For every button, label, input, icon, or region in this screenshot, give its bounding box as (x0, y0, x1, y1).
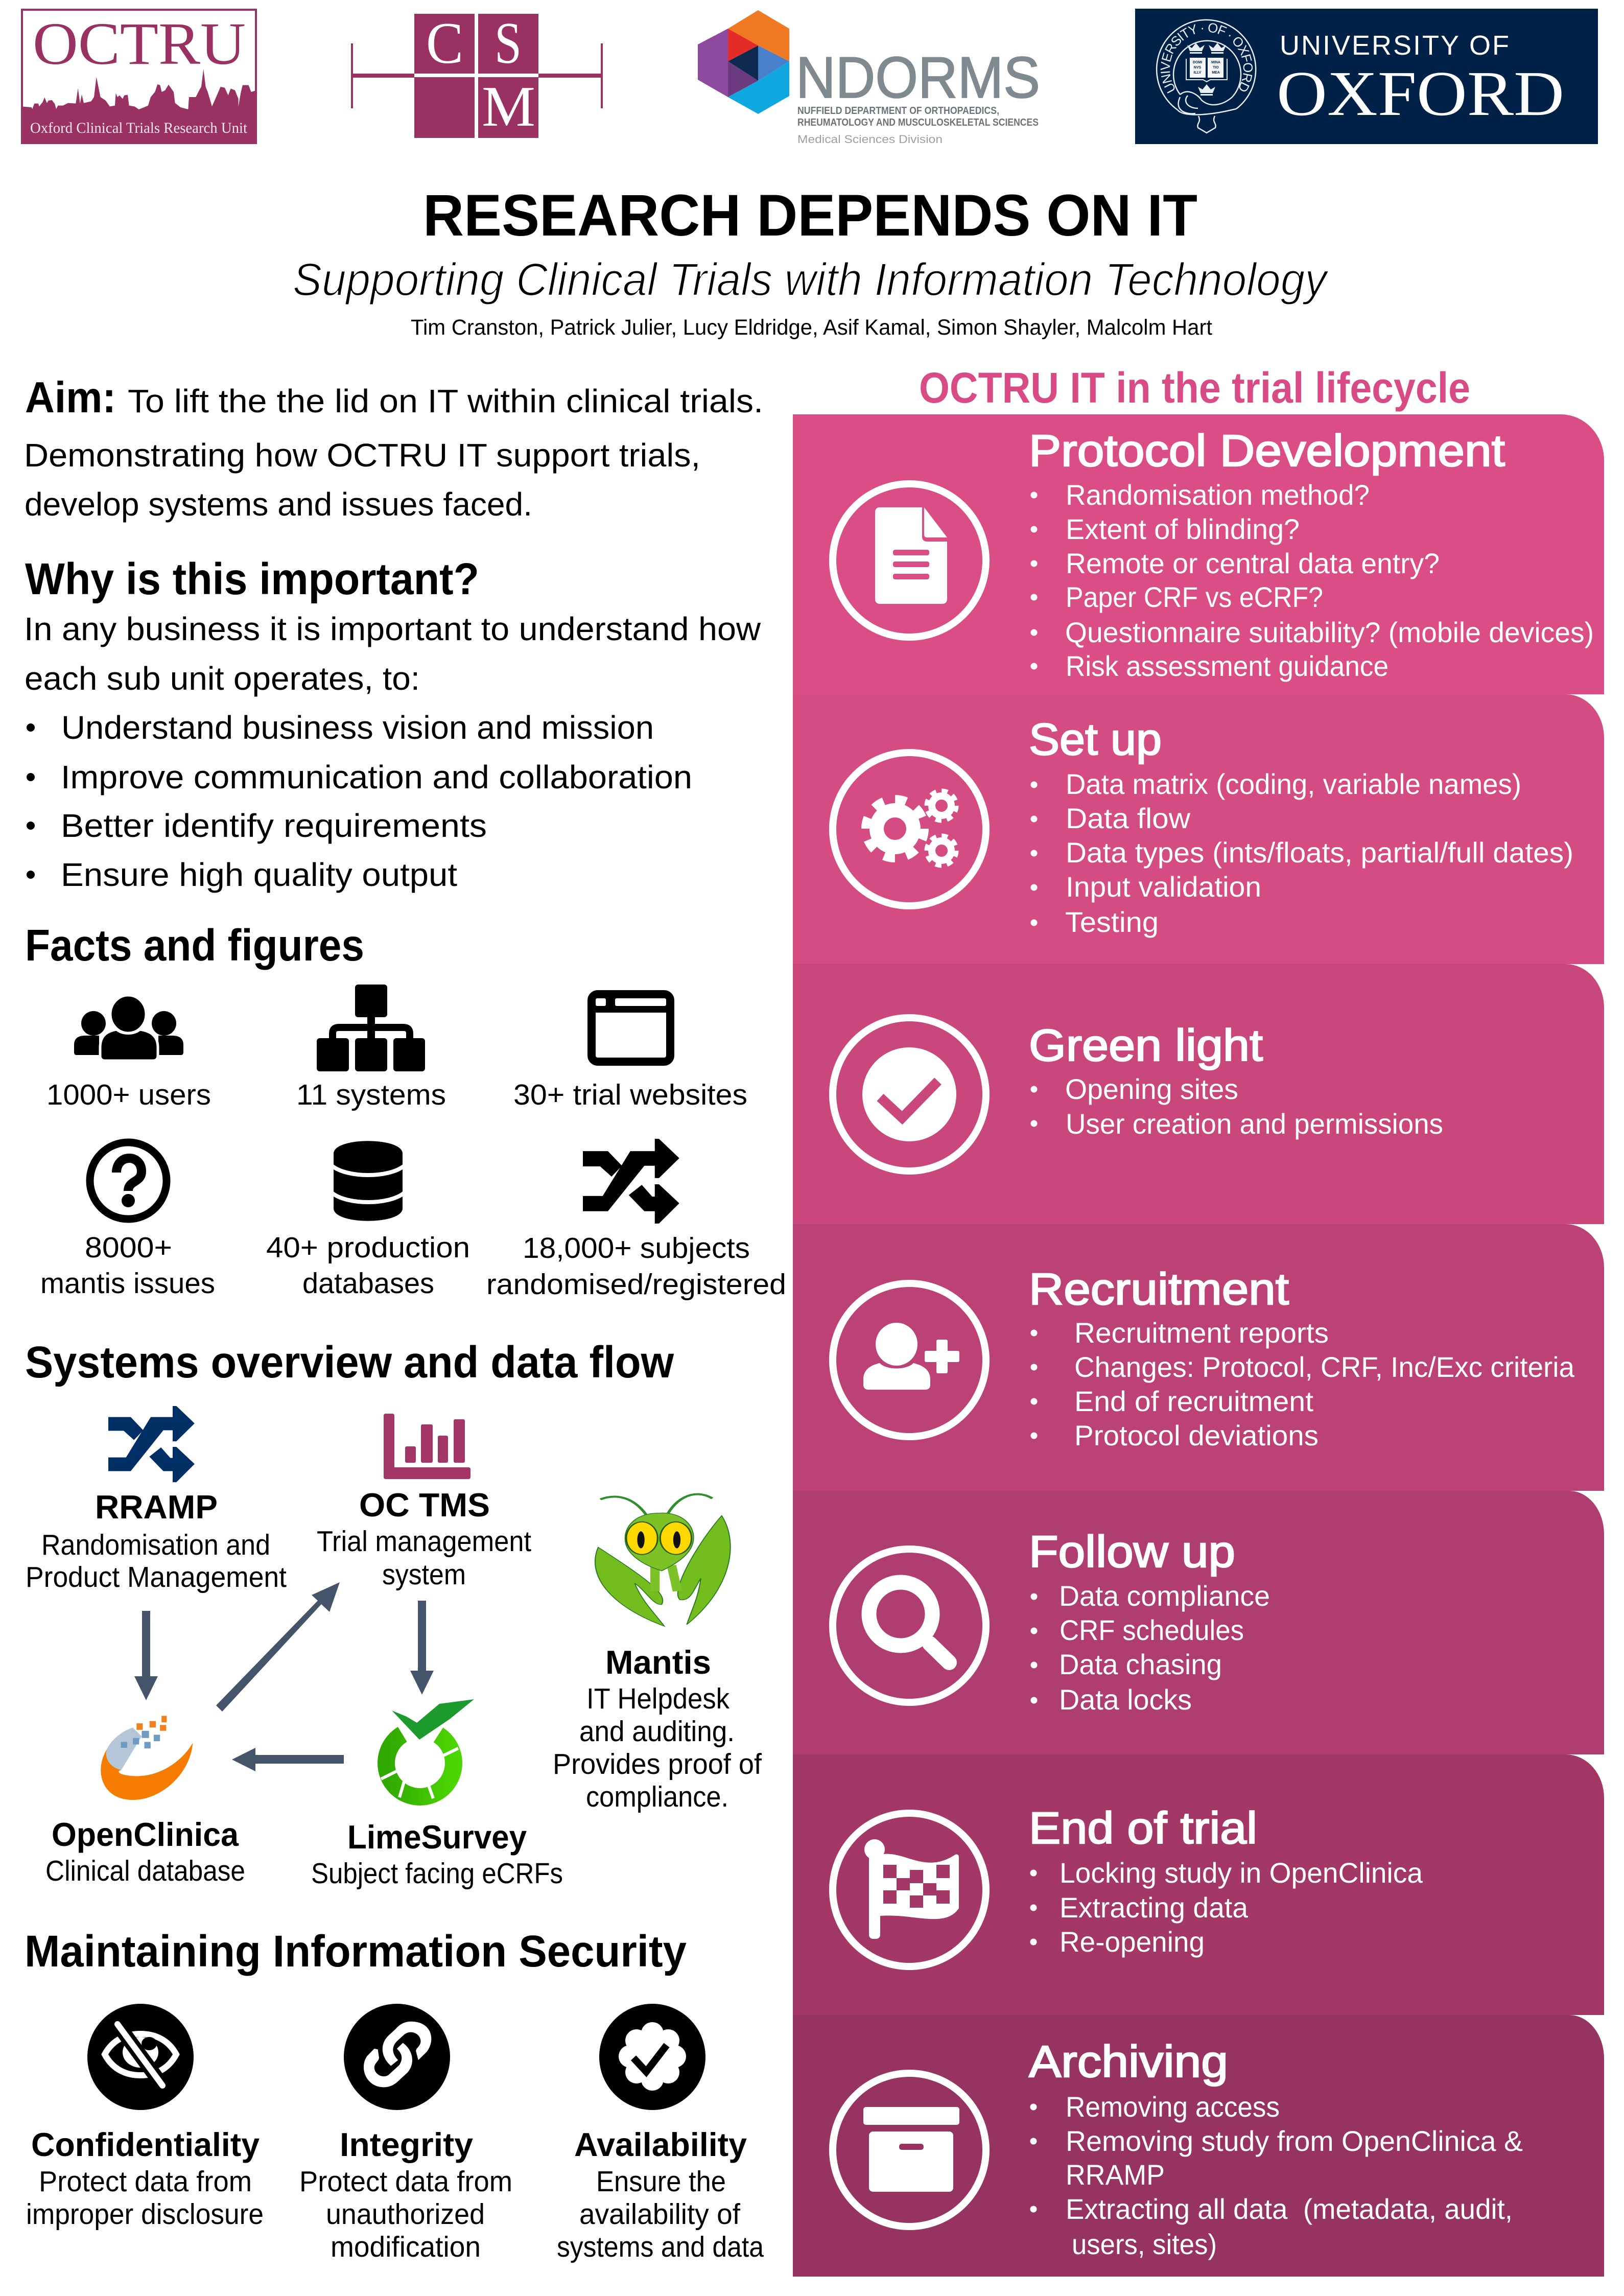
text block: aim: develop systems and issues faced. (25, 486, 532, 523)
label: Mantis: Provides proof of (553, 1748, 762, 1780)
panel: green light (793, 964, 1604, 1224)
label: OpenClinica (45, 1816, 245, 1887)
text: archiving (1029, 2037, 1523, 2260)
text: availability: Ensure the (596, 2165, 726, 2198)
text: archiving: Extracting all data (metadata, audit, (1066, 2193, 1513, 2225)
logo: University of Oxford: UNIVERSITY · OF · OXFORD (1161, 24, 1253, 93)
text: protocol development: Randomisation method? (1066, 479, 1370, 511)
label: Mantis: and auditing. (579, 1715, 735, 1748)
text block: why important: Ensure high quality output (61, 856, 457, 893)
label: OC TMS: OC TMS (359, 1486, 490, 1524)
label: Mantis (553, 1644, 762, 1813)
text block: why important: Improve communication and collaboration (61, 759, 692, 795)
label: Mantis: Mantis (605, 1644, 711, 1681)
text: integrity: unauthorized (326, 2198, 485, 2231)
text: follow up (1029, 1527, 1270, 1716)
label: mantis issues (40, 1231, 215, 1300)
icon: document (833, 484, 986, 637)
label: RRAMP: RRAMP (95, 1488, 218, 1526)
label: users: 1000+ users (46, 1079, 211, 1111)
label: OpenClinica: OpenClinica (52, 1816, 239, 1853)
text: availability (557, 2126, 764, 2263)
text: integrity: Protect data from (299, 2165, 512, 2198)
label: subjects randomised: 18,000+ subjects (523, 1232, 750, 1264)
text: green light: Opening sites (1065, 1073, 1238, 1105)
text: end of trial (1029, 1803, 1423, 1958)
icon: chequered flag (833, 1813, 986, 1966)
label: OC TMS (317, 1486, 531, 1591)
heading: why is this important: Why is this important? (25, 554, 479, 604)
text: follow up: Data locks (1059, 1683, 1192, 1716)
label: RRAMP (26, 1488, 287, 1594)
panel: end of trial (793, 1754, 1604, 2015)
logo: OCTRU: OCTRU (33, 10, 246, 77)
icon: users (74, 995, 183, 1061)
text block: why important (24, 611, 761, 893)
logo: University of Oxford: TIO (1213, 66, 1219, 69)
label: Mantis: IT Helpdesk (586, 1682, 729, 1715)
text: end of trial: Re-opening (1060, 1926, 1205, 1958)
logo: University of Oxford (1135, 9, 1598, 144)
text: green light (1029, 1021, 1443, 1140)
text: set up: Data types (ints/floats, partial/full dates) (1066, 836, 1573, 869)
text: green light: User creation and permissions (1066, 1108, 1443, 1140)
text: archiving: users, sites) (1072, 2228, 1217, 2260)
text: availability: availability of (579, 2198, 740, 2231)
label: RRAMP: Randomisation and (41, 1529, 270, 1561)
label: mantis issues: 8000+ (85, 1231, 172, 1264)
text: follow up: CRF schedules (1060, 1614, 1244, 1646)
heading: lifecycle: OCTRU IT in the trial lifecycle (919, 364, 1470, 412)
text: recruitment (1029, 1264, 1575, 1451)
label: trial websites: 30+ trial websites (513, 1079, 747, 1111)
text: recruitment: Recruitment reports (1074, 1317, 1329, 1349)
text: archiving: RRAMP (1066, 2159, 1165, 2191)
text: recruitment: End of recruitment (1074, 1385, 1313, 1417)
label: RRAMP: Product Management (26, 1561, 287, 1594)
logo: CSM: S (495, 11, 522, 76)
text block: why important: Better identify requirements (61, 807, 487, 844)
label: production databases (266, 1231, 470, 1300)
panel: archiving (793, 2015, 1604, 2277)
logo: NDORMS (698, 10, 1040, 146)
text: end of trial: End of trial (1029, 1803, 1257, 1853)
logo: University of Oxford: MEA (1212, 71, 1220, 75)
arrow: RRAMP to OpenClinica (134, 1611, 158, 1700)
text block: aim: To lift the the lid on IT within clinical trials. (128, 383, 763, 419)
text: confidentiality: improper disclosure (26, 2198, 264, 2231)
logo: University of Oxford: NVS (1194, 66, 1202, 69)
text block: why important: Understand business vision and mission (61, 709, 654, 746)
heading: maintaining information security: Maintaining Information Security (25, 1927, 687, 1976)
text: protocol development: Paper CRF vs eCRF? (1066, 581, 1323, 613)
text: protocol development (1029, 426, 1594, 682)
icon: browser window (592, 994, 670, 1062)
text: protocol development: Remote or central data entry? (1066, 547, 1440, 579)
text: archiving: Removing study from OpenClinica & (1066, 2125, 1523, 2157)
text: confidentiality (26, 2126, 264, 2231)
text: set up: Input validation (1066, 871, 1261, 903)
icon: question mark (90, 1142, 167, 1219)
icon: OpenClinica (101, 1716, 193, 1800)
panel: recruitment (793, 1224, 1604, 1491)
text: protocol development: Extent of blinding? (1066, 513, 1300, 545)
text block: why important: In any business it is important to understand how (24, 611, 761, 647)
text: set up: Data flow (1066, 802, 1191, 834)
logo: CSM: M (482, 75, 535, 138)
text: archiving: Archiving (1029, 2037, 1228, 2087)
label: LimeSurvey (311, 1818, 563, 1890)
icon: check (833, 1018, 986, 1171)
label: LimeSurvey: Subject facing eCRFs (311, 1857, 563, 1890)
label: systems: 11 systems (296, 1079, 446, 1111)
text: recruitment: Changes: Protocol, CRF, Inc/Exc criteria (1074, 1351, 1575, 1383)
text: set up: Testing (1065, 906, 1159, 938)
logo: University of Oxford: MINA (1211, 61, 1220, 64)
subtitle: Supporting Clinical Trials with Information Technology (293, 254, 1329, 306)
authors: Tim Cranston, Patrick Julier, Lucy Eldridge, Asif Kamal, Simon Shayler, Malcolm Hart (411, 315, 1212, 340)
panel: protocol development (793, 414, 1604, 694)
icon: hierarchy (317, 985, 425, 1071)
heading: systems overview: Systems overview and data flow (25, 1338, 674, 1387)
text: set up: Set up (1029, 715, 1162, 764)
text: set up (1029, 715, 1573, 938)
text: integrity: Integrity (340, 2126, 473, 2163)
logo: University of Oxford: UNIVERSITY OF (1280, 30, 1509, 61)
text block: aim (24, 373, 763, 523)
text: follow up: Data compliance (1059, 1580, 1270, 1612)
text: recruitment: Protocol deviations (1074, 1419, 1319, 1451)
text: follow up: Follow up (1029, 1527, 1235, 1577)
text: follow up: Data chasing (1059, 1648, 1222, 1680)
heading: facts and figures: Facts and figures (25, 921, 364, 970)
logo: OCTRU: Oxford Clinical Trials Research Unit (30, 120, 248, 136)
title: RESEARCH DEPENDS ON IT (423, 183, 1197, 248)
logo: NDORMS: NDORMS (796, 45, 1040, 110)
logo: NDORMS: Medical Sciences Division (797, 133, 943, 146)
label: LimeSurvey: LimeSurvey (347, 1818, 527, 1856)
label: OpenClinica: Clinical database (45, 1855, 245, 1887)
label: mantis issues: mantis issues (40, 1267, 215, 1300)
text: protocol development: Protocol Development (1029, 426, 1505, 476)
icon: RRAMP shuffle (108, 1406, 195, 1482)
text: confidentiality: Confidentiality (31, 2126, 260, 2163)
label: subjects randomised: randomised/registered (486, 1268, 786, 1301)
text block: why important: each sub unit operates, to: (25, 660, 420, 697)
text block: aim: Demonstrating how OCTRU IT support trials, (24, 437, 700, 474)
icon: gears (833, 753, 986, 906)
label: subjects randomised (486, 1232, 786, 1301)
text: protocol development: Questionnaire suitability? (mobile devices) (1065, 616, 1594, 648)
logo: University of Oxford: ILLV (1194, 71, 1202, 75)
label: OC TMS: system (382, 1558, 466, 1591)
text: integrity (299, 2126, 512, 2263)
icon: magnifier (833, 1549, 986, 1702)
arrow: OpenClinica to OC TMS (216, 1582, 340, 1712)
text: confidentiality: Protect data from (39, 2165, 252, 2198)
text: set up: Data matrix (coding, variable names) (1066, 768, 1521, 800)
icon: confidentiality (87, 2004, 194, 2110)
text: recruitment: Recruitment (1029, 1264, 1289, 1314)
text: archiving: Removing access (1066, 2091, 1280, 2123)
icon: archive box (833, 2073, 986, 2227)
arrow: OC TMS to LimeSurvey (410, 1601, 434, 1695)
icon: integrity (344, 2004, 450, 2110)
icon: OC TMS bar chart (384, 1414, 470, 1479)
text: green light: Green light (1029, 1021, 1263, 1070)
icon: shuffle (583, 1139, 679, 1224)
logo: CSM (351, 11, 603, 138)
label: Mantis: compliance. (586, 1780, 728, 1813)
logo: OCTRU (21, 10, 257, 144)
logo: University of Oxford: OXFORD (1277, 59, 1564, 129)
panel: set up (793, 694, 1604, 964)
text: integrity: modification (331, 2231, 481, 2263)
text: protocol development: Risk assessment guidance (1066, 650, 1388, 682)
text: availability: Availability (574, 2126, 747, 2163)
logo: NDORMS: NUFFIELD DEPARTMENT OF ORTHOPAEDICS, (797, 105, 999, 116)
icon: LimeSurvey (381, 1699, 474, 1798)
logo: University of Oxford: DOMI (1193, 61, 1202, 64)
logo: NDORMS: RHEUMATOLOGY AND MUSCULOSKELETAL SCIENCES (797, 117, 1039, 128)
arrow: LimeSurvey to OpenClinica (232, 1748, 344, 1771)
text: availability: systems and data (557, 2231, 764, 2263)
panel: follow up (793, 1491, 1604, 1754)
text block: aim: Aim: (25, 373, 116, 422)
label: production databases: 40+ production (266, 1231, 470, 1264)
label: production databases: databases (302, 1267, 434, 1300)
icon: add user (833, 1283, 986, 1437)
icon: database (332, 1141, 404, 1221)
text: end of trial: Locking study in OpenClinica (1060, 1857, 1423, 1889)
icon: availability (599, 2004, 705, 2110)
label: OC TMS: Trial management (317, 1525, 531, 1558)
logo: CSM: C (426, 11, 463, 76)
text: end of trial: Extracting data (1060, 1891, 1249, 1924)
icon: Mantis (595, 1494, 731, 1626)
